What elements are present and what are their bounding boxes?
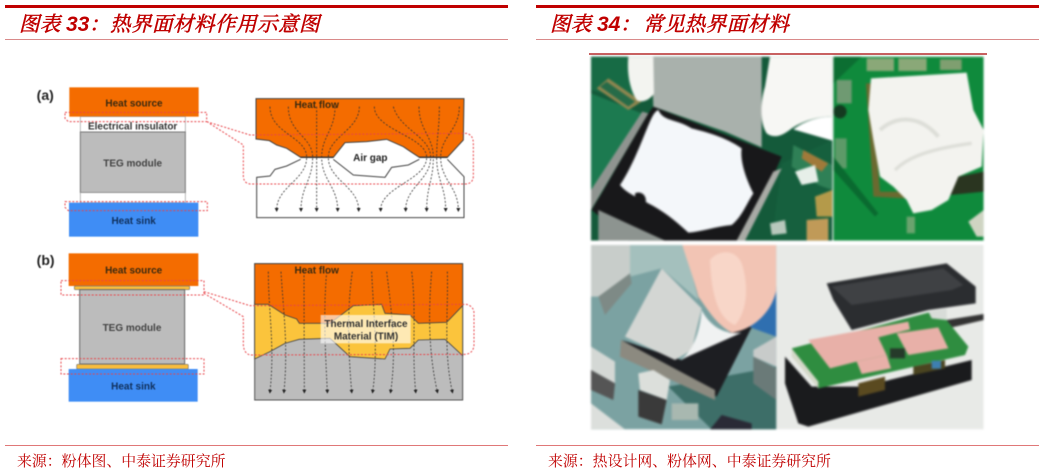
- heat flow arrows (b): [268, 272, 452, 392]
- diagram (a): without interface material: [37, 87, 473, 237]
- photo: peeling thermal pad from chip: [591, 245, 776, 429]
- photo panel rule: [589, 53, 987, 55]
- heading: figure 33: [19, 13, 322, 36]
- source rule: left: [5, 445, 508, 446]
- stack (a): heat source, insulator, TEG, heat sink: Heat source: [105, 98, 163, 109]
- magnified interface (a) with air gap: Air gap: [353, 153, 388, 164]
- photo: pink thermal pads on open power module: [776, 245, 984, 429]
- TIM label: Material (TIM): [334, 332, 398, 343]
- stack (a): heat source, insulator, TEG, heat sink: Electrical insulator: [88, 121, 177, 132]
- stack (a): heat source, insulator, TEG, heat sink: Heat sink: [111, 216, 156, 227]
- label (b): (b): [37, 252, 55, 268]
- photo panel: common thermal interface materials: [589, 54, 986, 432]
- stack (b): heat source, TIM, TEG, TIM, heat sink: Heat source: [105, 266, 163, 277]
- TIM label: Thermal Interface: [324, 319, 408, 330]
- photo: white paste on green board: [833, 57, 984, 241]
- zoom callout outline (b): [61, 281, 474, 374]
- diagram (b): with thermal interface material: [37, 252, 474, 402]
- stack (b): heat source, TIM, TEG, TIM, heat sink: TEG module: [103, 323, 162, 334]
- photo: paste spread by roller on chip: [591, 57, 832, 241]
- heading: figure 33: ：: [89, 14, 110, 36]
- source note: right: 来源：热设计网、粉体网、中泰证券研究所: [548, 454, 831, 470]
- stack (b): heat source, TIM, TEG, TIM, heat sink: [69, 253, 198, 402]
- stack (a): heat source, insulator, TEG, heat sink: TEG module: [103, 158, 163, 169]
- heading: figure 34: 34: [597, 13, 620, 36]
- stack (a): heat source, insulator, TEG, heat sink: [69, 87, 199, 237]
- source rule: right: [536, 445, 1039, 446]
- magnified interface (b) with TIM: [255, 264, 463, 400]
- heading: figure 33: 33: [66, 13, 89, 36]
- stack (b): heat source, TIM, TEG, TIM, heat sink: Heat sink: [111, 382, 156, 393]
- magnified interface (a) with air gap: [256, 99, 464, 218]
- panel header thin rule: right: [536, 39, 1039, 40]
- panel header rule: right top: [536, 5, 1039, 8]
- heading: figure 34: ：: [620, 14, 640, 36]
- magnified interface (a) with air gap: Heat flow: [294, 100, 339, 111]
- heading: figure 33: 热界面材料作用示意图: [110, 14, 320, 36]
- magnified interface (b) with TIM: Heat flow: [294, 266, 339, 277]
- source note: left: 来源：粉体图、中泰证券研究所: [17, 454, 225, 470]
- zoom callout outline (a): [65, 112, 473, 211]
- heading: figure 33: 图表: [19, 14, 60, 36]
- label (a): (a): [37, 87, 54, 103]
- panel header rule: left top: [5, 5, 508, 8]
- heading: figure 34: 图表: [550, 14, 591, 36]
- heading: figure 34: 常见热界面材料: [643, 14, 789, 36]
- heat flow arrows (a): [270, 107, 459, 210]
- panel header thin rule: left: [5, 39, 508, 40]
- heading: figure 34: [550, 13, 791, 36]
- TIM label: [321, 315, 411, 343]
